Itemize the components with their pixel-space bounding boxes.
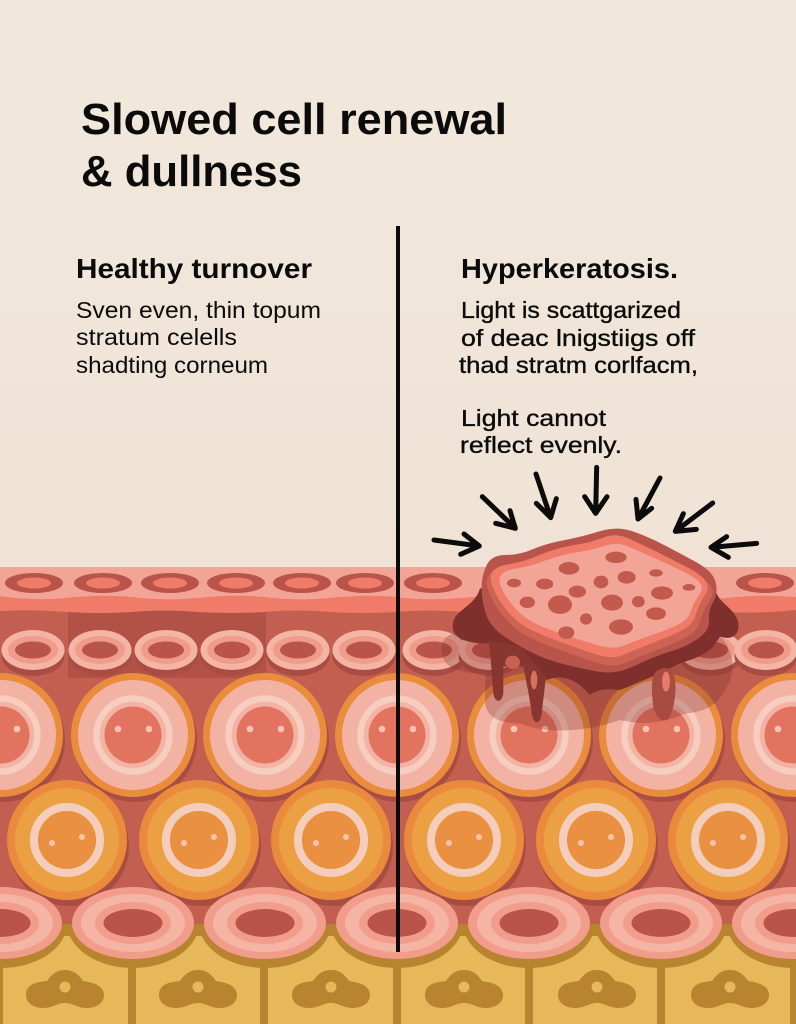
arrow 6 <box>675 503 713 531</box>
arrow 3 <box>536 474 556 518</box>
row: orange cells <box>7 780 790 906</box>
title <box>81 95 507 196</box>
text block: light cannot reflect: Light cannot <box>461 405 607 431</box>
row: basal nuclei <box>26 970 769 1008</box>
dark under-mass <box>453 588 739 695</box>
text block: healthy description: stratum celells <box>76 324 237 350</box>
translucent shadow <box>442 632 733 730</box>
text block: light cannot reflect: reflect evenly. <box>460 432 622 458</box>
layer: basal gold <box>0 924 796 1024</box>
text block: healthy description: Sven even, thin topum <box>76 297 321 323</box>
arrow 7 <box>711 537 757 557</box>
row: gold halos <box>3 936 790 968</box>
drips left <box>488 640 546 722</box>
arrow 4 <box>585 467 607 513</box>
panel text: hyperkeratosis <box>459 253 698 458</box>
arrow 5 <box>636 478 660 519</box>
layer: stratum top band <box>0 567 796 603</box>
skin cross-section <box>0 567 796 1024</box>
drip right <box>652 668 676 720</box>
text block: hyperkeratosis description: thad stratm corlfacm, <box>459 352 698 378</box>
heading: hyperkeratosis: Hyperkeratosis. <box>461 253 678 284</box>
text block: hyperkeratosis description: of deac lnigstiigs off <box>461 325 696 351</box>
plaque spots <box>507 552 695 639</box>
title: & dullness <box>81 147 302 196</box>
arrows pointing at plaque <box>434 467 757 557</box>
tissue base <box>0 600 796 1024</box>
arrow 1 <box>434 534 479 554</box>
divider line <box>396 226 400 952</box>
plaque layers <box>482 529 717 673</box>
layer: salmon wavy band <box>0 596 796 613</box>
text block: light cannot reflect <box>460 405 622 458</box>
text block: healthy description: shadting corneum <box>76 352 268 378</box>
panel text: healthy turnover <box>76 253 321 378</box>
arrow 2 <box>482 497 515 528</box>
row: flat surface cells <box>5 573 794 593</box>
row: lower ring cells <box>0 887 796 959</box>
heading: healthy turnover: Healthy turnover <box>76 253 312 284</box>
text block: hyperkeratosis description <box>459 297 698 378</box>
text block: healthy description <box>76 297 321 378</box>
text block: hyperkeratosis description: Light is scattgarized <box>461 297 681 323</box>
hyperkeratosis plaque <box>442 529 739 730</box>
row: large round cells <box>0 673 796 802</box>
row: yellow basal cells <box>3 936 790 1024</box>
title: Slowed cell renewal <box>81 95 507 144</box>
row: pink ring cells <box>2 630 796 676</box>
